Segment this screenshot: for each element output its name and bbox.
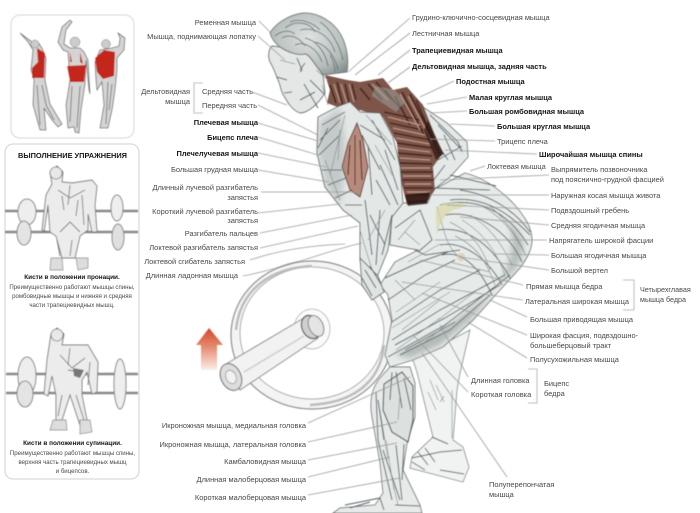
label: Полуперепончатая bbox=[489, 480, 554, 489]
label: Большой вертел bbox=[551, 266, 608, 275]
caption: pronation: ромбовидные мышцы и нижняя и средняя bbox=[12, 293, 132, 300]
label: Трицепс плеча bbox=[497, 137, 549, 146]
hip and thigh bbox=[380, 173, 532, 367]
label: Бицепс bbox=[544, 379, 569, 388]
main figure: bent-over athlete anatomy bbox=[269, 13, 532, 513]
leader lines bbox=[194, 18, 634, 495]
label: Четырехглавая bbox=[640, 285, 691, 294]
rear arm / triceps bbox=[423, 107, 496, 190]
label bbox=[530, 331, 639, 350]
figure: back view bbox=[95, 33, 125, 128]
label: запястья bbox=[227, 193, 258, 202]
label: Прямая мышца бедра bbox=[526, 282, 603, 291]
label: deltoid group bbox=[141, 87, 191, 106]
label: Подостная мышца bbox=[456, 77, 525, 86]
label: Большая приводящая мышца bbox=[530, 315, 634, 324]
label: под пояснично-грудной фасцией bbox=[551, 175, 664, 184]
label: Короткая малоберцовая мышца bbox=[195, 493, 307, 502]
label: Плечевая мышца bbox=[194, 118, 259, 127]
label bbox=[152, 207, 258, 225]
label: Разгибатель пальцев bbox=[185, 229, 258, 238]
labels: left column bbox=[141, 18, 307, 502]
caption: supination: Преимущественно работают мышцы спины, bbox=[10, 450, 135, 457]
label: Камбаловидная мышца bbox=[224, 457, 307, 466]
label: Большая круглая мышца bbox=[497, 122, 591, 131]
heading: ВЫПОЛНЕНИЕ УПРАЖНЕНИЯ bbox=[18, 151, 127, 160]
hand and bar grip bbox=[360, 258, 384, 300]
label: Широкая фасция, подвздошно- bbox=[530, 331, 639, 340]
front lower leg bbox=[333, 367, 422, 513]
label: Длинная малоберцовая мышца bbox=[197, 475, 307, 484]
label: Длинный лучевой разгибатель bbox=[152, 183, 258, 192]
label: Большая ягодичная мышца bbox=[551, 251, 647, 260]
caption: supination: и бицепсов. bbox=[56, 468, 90, 475]
label: Длинная ладонная мышца bbox=[146, 271, 239, 280]
label: Трапециевидная мышца bbox=[412, 46, 503, 55]
label: Дельтовидная мышца, задняя часть bbox=[412, 62, 547, 71]
label: Большая ромбовидная мышца bbox=[469, 107, 585, 116]
label: Средняя часть bbox=[202, 87, 253, 96]
label: Локтевой сгибатель запястья bbox=[144, 257, 245, 266]
caption: pronation bbox=[9, 274, 135, 309]
label: Локтевая мышца bbox=[487, 162, 547, 171]
icon: upward arrow bbox=[196, 328, 223, 370]
label: Мышца, поднимающая лопатку bbox=[147, 32, 256, 41]
label bbox=[544, 379, 569, 398]
hair bbox=[270, 13, 348, 75]
label: Подвздошный гребень bbox=[551, 206, 629, 215]
back muscles: trapezius, rhomboid, latissimus bbox=[325, 75, 444, 206]
caption: pronation: части трапециевидных мышц. bbox=[29, 302, 115, 309]
muscle striations bbox=[330, 82, 440, 155]
label: Широчайшая мышца спины bbox=[539, 150, 643, 159]
caption: pronation: Кисти в положении пронации. bbox=[24, 274, 120, 281]
label: Большая грудная мышца bbox=[171, 165, 259, 174]
label: Лестничная мышца bbox=[412, 29, 480, 38]
gluteus fibres bbox=[438, 190, 530, 295]
label: Малая круглая мышца bbox=[469, 93, 553, 102]
label: deltoid group: мышца bbox=[165, 97, 191, 106]
caption: supination: верхняя часть трапециевидных мышц bbox=[18, 459, 127, 466]
label bbox=[640, 285, 691, 304]
caption: pronation: Преимущественно работают мышцы спины, bbox=[9, 284, 135, 291]
label: Средняя ягодичная мышца bbox=[551, 221, 646, 230]
label: Бицепс плеча bbox=[207, 133, 259, 142]
panel: muscles worked bbox=[11, 15, 134, 138]
label: Локтевой разгибатель запястья bbox=[149, 243, 258, 252]
head and face bbox=[269, 46, 328, 113]
label: Латеральная широкая мышца bbox=[525, 297, 630, 306]
label: Плечелучевая мышца bbox=[177, 149, 259, 158]
label: мышца бедра bbox=[640, 295, 686, 304]
label: Икроножная мышца, латеральная головка bbox=[160, 440, 307, 449]
label: Икроножная мышца, медиальная головка bbox=[162, 421, 307, 430]
label: Короткая головка bbox=[471, 390, 532, 399]
illustration: supinated grip bbox=[6, 328, 138, 434]
label: Передняя часть bbox=[202, 101, 257, 110]
label: Напрягатель широкой фасции bbox=[549, 236, 653, 245]
label: Наружная косая мышца живота bbox=[551, 191, 661, 200]
barbell sleeve bbox=[216, 312, 327, 394]
label: запястья bbox=[227, 216, 258, 225]
labels: right column bbox=[412, 13, 691, 499]
illustration: pronated grip bbox=[5, 166, 138, 270]
panel: exercise technique bbox=[5, 144, 139, 479]
label: Полусухожильная мышца bbox=[530, 355, 620, 364]
label: бедра bbox=[544, 389, 566, 398]
label: Грудино-ключично-сосцевидная мышца bbox=[412, 13, 551, 22]
caption: supination bbox=[10, 440, 135, 475]
label: Ременная мышца bbox=[195, 18, 257, 27]
barbell plate bbox=[231, 261, 393, 409]
label: Выпрямитель позвоночника bbox=[551, 165, 648, 174]
label bbox=[551, 165, 664, 184]
figure: front view bbox=[58, 20, 90, 133]
figure: side view bbox=[20, 33, 62, 130]
label: deltoid group: Дельтовидная bbox=[141, 87, 190, 96]
label bbox=[489, 480, 554, 499]
label: большеберцовый тракт bbox=[530, 341, 612, 350]
label: мышца bbox=[489, 490, 515, 499]
label bbox=[152, 183, 258, 202]
hair strands bbox=[275, 20, 343, 72]
caption: supination: Кисти в положении супинации. bbox=[23, 440, 122, 447]
label: Длинная головка bbox=[471, 376, 530, 385]
rear leg bbox=[410, 330, 470, 482]
shoulder and arm bbox=[317, 102, 403, 277]
label: Короткий лучевой разгибатель bbox=[152, 207, 258, 216]
